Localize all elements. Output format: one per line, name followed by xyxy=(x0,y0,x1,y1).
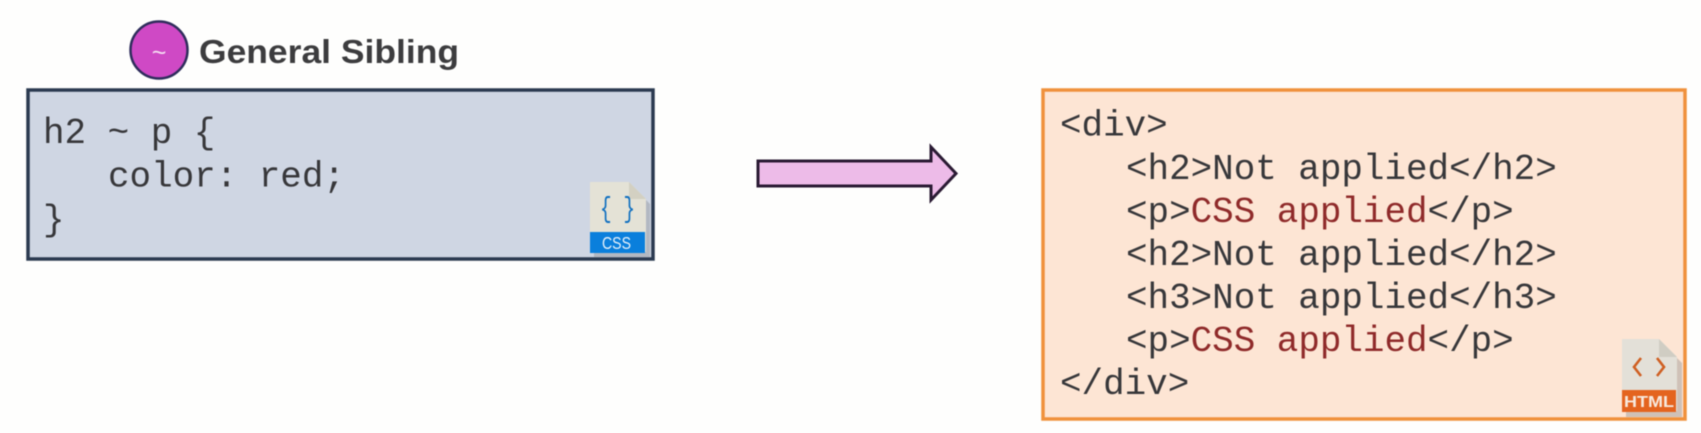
arrow xyxy=(758,147,956,200)
HTML code text: <h2>Not applied</h2> xyxy=(1126,149,1557,190)
icon: CSS file xyxy=(590,182,650,257)
icon: tilde badge xyxy=(130,22,188,78)
heading text: General Sibling xyxy=(199,33,459,70)
heading: General Sibling xyxy=(130,22,459,78)
panel: CSS code xyxy=(28,90,653,259)
HTML code text xyxy=(1060,106,1557,405)
CSS code text: } xyxy=(43,200,65,241)
HTML code text: <div> xyxy=(1060,106,1168,146)
HTML code text: <p>CSS applied</p> xyxy=(1126,192,1514,233)
HTML code text: </div> xyxy=(1060,364,1189,405)
panel: HTML code xyxy=(1043,90,1685,419)
icon: HTML file: HTML xyxy=(1624,394,1674,411)
icon: CSS file: { } xyxy=(600,193,635,226)
HTML code text: <h3>Not applied</h3> xyxy=(1126,278,1557,319)
HTML code text: <p>CSS applied</p> xyxy=(1126,321,1514,362)
CSS code text xyxy=(43,113,345,241)
CSS code text: h2 ~ p { xyxy=(43,113,215,154)
icon: HTML file xyxy=(1622,339,1682,417)
HTML code text: <h2>Not applied</h2> xyxy=(1126,235,1557,276)
icon: CSS file: CSS xyxy=(602,233,631,253)
icon: tilde badge: ~ xyxy=(152,39,166,67)
CSS code text: color: red; xyxy=(108,156,345,198)
